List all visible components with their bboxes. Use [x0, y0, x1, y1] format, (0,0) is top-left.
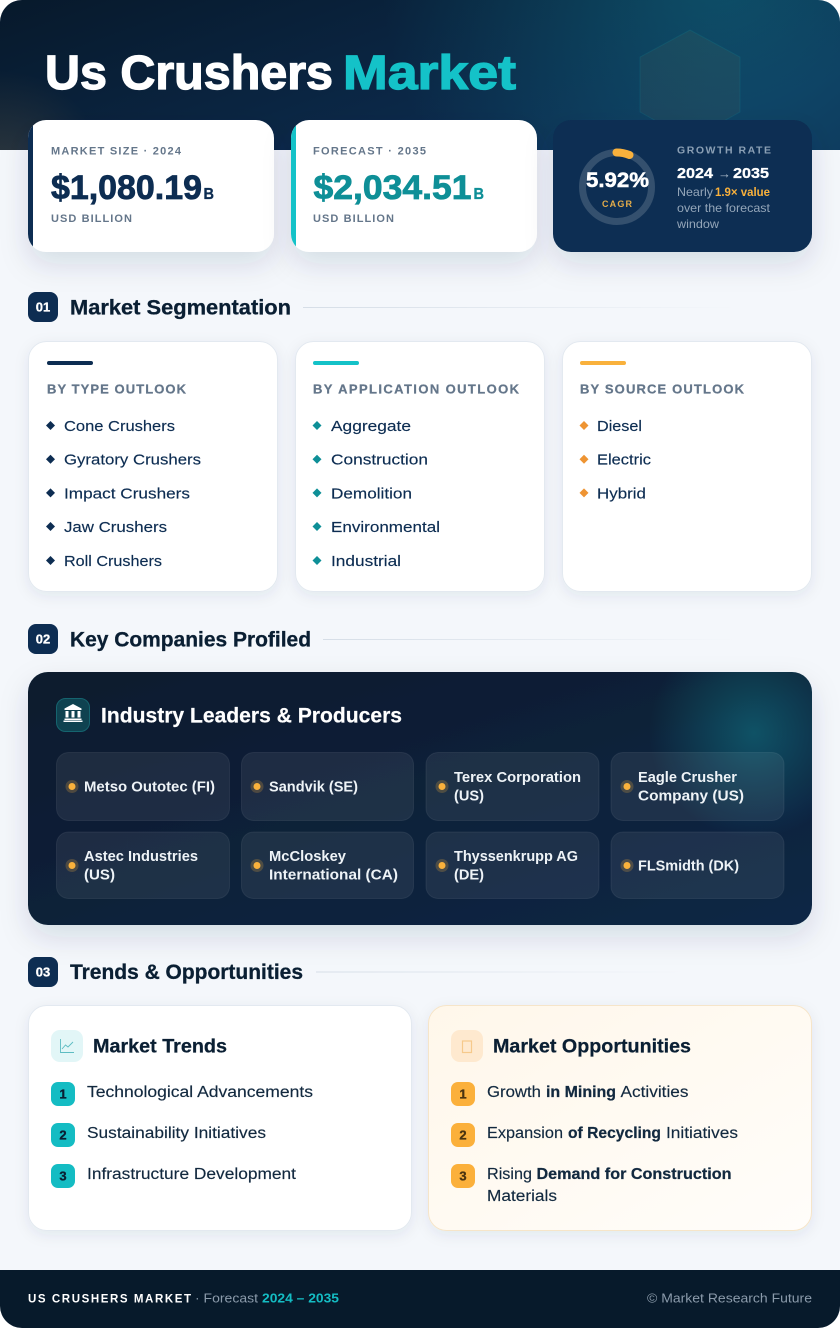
- panel: market opportunities: [428, 1006, 812, 1230]
- panel: by source outlook: BY SOURCE OUTLOOK: [580, 382, 745, 396]
- opportunity 2: [451, 1123, 738, 1147]
- growth rate text: [676, 144, 771, 231]
- trend 1: 1: [59, 1086, 67, 1102]
- stat card: market size 2024: B: [204, 186, 214, 203]
- stat card: forecast 2035: B: [474, 186, 484, 203]
- opportunity 2: of Recycling: [568, 1125, 661, 1142]
- list: type items: Cone Crushers: [64, 418, 175, 435]
- list: type items: Roll Crushers: [64, 553, 162, 570]
- company chip: Terex Corporation: (US): [454, 788, 484, 804]
- opportunity 3: 3: [459, 1168, 467, 1184]
- company chip: Terex Corporation: Terex Corporation: [454, 770, 581, 786]
- footer: US CRUSHERS MARKET: [28, 1294, 191, 1306]
- trend 3: 3: [59, 1168, 67, 1184]
- company chip: Terex Corporation: [426, 752, 599, 820]
- company chip: Eagle Crusher: Company (US): [638, 788, 744, 804]
- trend 3: [51, 1164, 297, 1188]
- list: application items: Construction: [331, 452, 428, 469]
- company chip: McCloskey: [242, 832, 414, 898]
- growth rate text: 1.9× value: [715, 185, 770, 199]
- growth rate text: over the forecast: [677, 201, 771, 215]
- company chip: Astec Industries: (US): [84, 868, 115, 884]
- list: type items: Impact Crushers: [64, 485, 190, 502]
- stat card: market size 2024: USD BILLION: [51, 213, 132, 225]
- company chip: McCloskey: International (CA): [269, 868, 398, 884]
- list: application items: Environmental: [331, 519, 440, 536]
- panel heading: Industry Leaders & Producers: [101, 704, 402, 728]
- company chip: Thyssenkrupp: Thyssenkrupp AG: [454, 849, 578, 865]
- list: type items: Jaw Crushers: [64, 519, 167, 536]
- list: source items: Diesel: [597, 418, 642, 435]
- company chip: McCloskey: McCloskey: [269, 849, 346, 865]
- stat card: CAGR growth rate: [553, 120, 812, 252]
- list: type items: [46, 418, 201, 570]
- CAGR ring gauge: 5.92%: [586, 169, 649, 192]
- stat card: forecast 2035: USD BILLION: [313, 213, 394, 225]
- company chip: Eagle Crusher: Eagle Crusher: [638, 770, 737, 786]
- title: Us Crushers: [45, 47, 333, 100]
- panel: market trends: [28, 1006, 412, 1230]
- opportunity 1: Growth: [487, 1084, 541, 1101]
- trend 2: Sustainability Initiatives: [87, 1125, 266, 1142]
- CAGR ring gauge: CAGR: [602, 199, 632, 209]
- list: application items: Industrial: [331, 553, 401, 570]
- section heading 02: [28, 624, 738, 654]
- footer: · Forecast: [195, 1292, 259, 1306]
- company chip: FLSmidth: [611, 832, 784, 898]
- opportunity 2: 2: [459, 1128, 467, 1142]
- panel: key companies: [28, 672, 812, 925]
- list: source items: [580, 418, 652, 502]
- icon: line chart: [51, 1030, 83, 1062]
- stat card: forecast 2035: $2,034.51: [314, 169, 472, 207]
- footer: © Market Research Future: [647, 1292, 812, 1306]
- panel: market trends: Market Trends: [93, 1036, 227, 1058]
- company chip: Sandvik: [242, 752, 414, 820]
- panel: by application outlook: BY APPLICATION OUTLOOK: [313, 382, 520, 396]
- section heading 01: Market Segmentation: [70, 296, 291, 320]
- opportunity 3: Materials: [487, 1188, 557, 1205]
- stat card: market size 2024: [28, 120, 274, 252]
- section heading 03: 03: [36, 964, 50, 980]
- opportunity 1: Activities: [620, 1084, 689, 1101]
- opportunity 3: Rising: [487, 1166, 532, 1183]
- company chip: Metso Outotec: [56, 752, 230, 820]
- company chip: Astec Industries: [56, 832, 230, 898]
- list: application items: Demolition: [331, 485, 412, 502]
- company chip: Metso Outotec: Metso Outotec (FI): [84, 780, 215, 796]
- company chip: Thyssenkrupp: [426, 832, 599, 898]
- section heading 01: 01: [36, 300, 50, 314]
- opportunity 1: in Mining: [546, 1084, 616, 1101]
- section heading 03: Trends & Opportunities: [70, 961, 303, 984]
- company chip: FLSmidth: FLSmidth (DK): [638, 858, 739, 874]
- panel: by source outlook: [562, 342, 812, 592]
- title: Market: [343, 47, 516, 100]
- panel: market opportunities: Market Opportunities: [493, 1036, 691, 1058]
- growth rate text: window: [676, 217, 719, 231]
- footer: 2024 – 2035: [262, 1292, 339, 1306]
- stat card: forecast 2035: [291, 120, 537, 252]
- list: application items: [312, 418, 440, 570]
- trend 1: Technological Advancements: [87, 1084, 313, 1101]
- list: source items: Hybrid: [597, 485, 646, 502]
- list: type items: Gyratory Crushers: [64, 452, 201, 469]
- opportunity 2: Expansion: [487, 1125, 563, 1142]
- section heading 03: [28, 957, 688, 987]
- trend 3: Infrastructure Development: [87, 1166, 297, 1183]
- section heading 01: [28, 292, 738, 322]
- CAGR ring gauge: [582, 152, 652, 222]
- opportunity 3: Demand for Construction: [536, 1166, 732, 1183]
- growth rate text: →: [718, 166, 731, 181]
- company chip: Astec Industries: Astec Industries: [84, 849, 198, 865]
- opportunity 1: 1: [459, 1086, 467, 1102]
- opportunity 2: Initiatives: [666, 1125, 738, 1142]
- icon: missing glyph box: [451, 1030, 483, 1062]
- growth rate text: Nearly: [677, 185, 713, 199]
- growth rate text: GROWTH RATE: [677, 144, 771, 156]
- header band: [0, 0, 840, 150]
- panel: by application outlook: [296, 342, 544, 592]
- stat card: forecast 2035: FORECAST · 2035: [313, 146, 426, 158]
- panel: by type outlook: [28, 342, 278, 592]
- stat card: market size 2024: MARKET SIZE · 2024: [51, 146, 182, 158]
- company chip: Sandvik: Sandvik (SE): [269, 780, 358, 796]
- section heading 02: Key Companies Profiled: [70, 628, 311, 652]
- trend 2: 2: [59, 1128, 67, 1142]
- panel: by type outlook: BY TYPE OUTLOOK: [47, 382, 187, 396]
- company chip: Thyssenkrupp: (DE): [454, 868, 484, 884]
- growth rate text: 2024: [677, 165, 714, 182]
- section heading 02: 02: [36, 632, 50, 646]
- trend 1: [51, 1082, 313, 1106]
- company chip: Eagle Crusher: [611, 752, 784, 820]
- title: [45, 47, 516, 100]
- stat card: market size 2024: $1,080.19: [51, 169, 202, 207]
- icon: bank building: [56, 698, 90, 732]
- footer: [0, 1270, 840, 1328]
- opportunity 1: [451, 1082, 689, 1106]
- trend 2: [51, 1123, 266, 1147]
- opportunity 3: [451, 1164, 732, 1205]
- list: source items: Electric: [597, 452, 652, 469]
- list: application items: Aggregate: [331, 418, 411, 435]
- growth rate text: 2035: [733, 165, 769, 182]
